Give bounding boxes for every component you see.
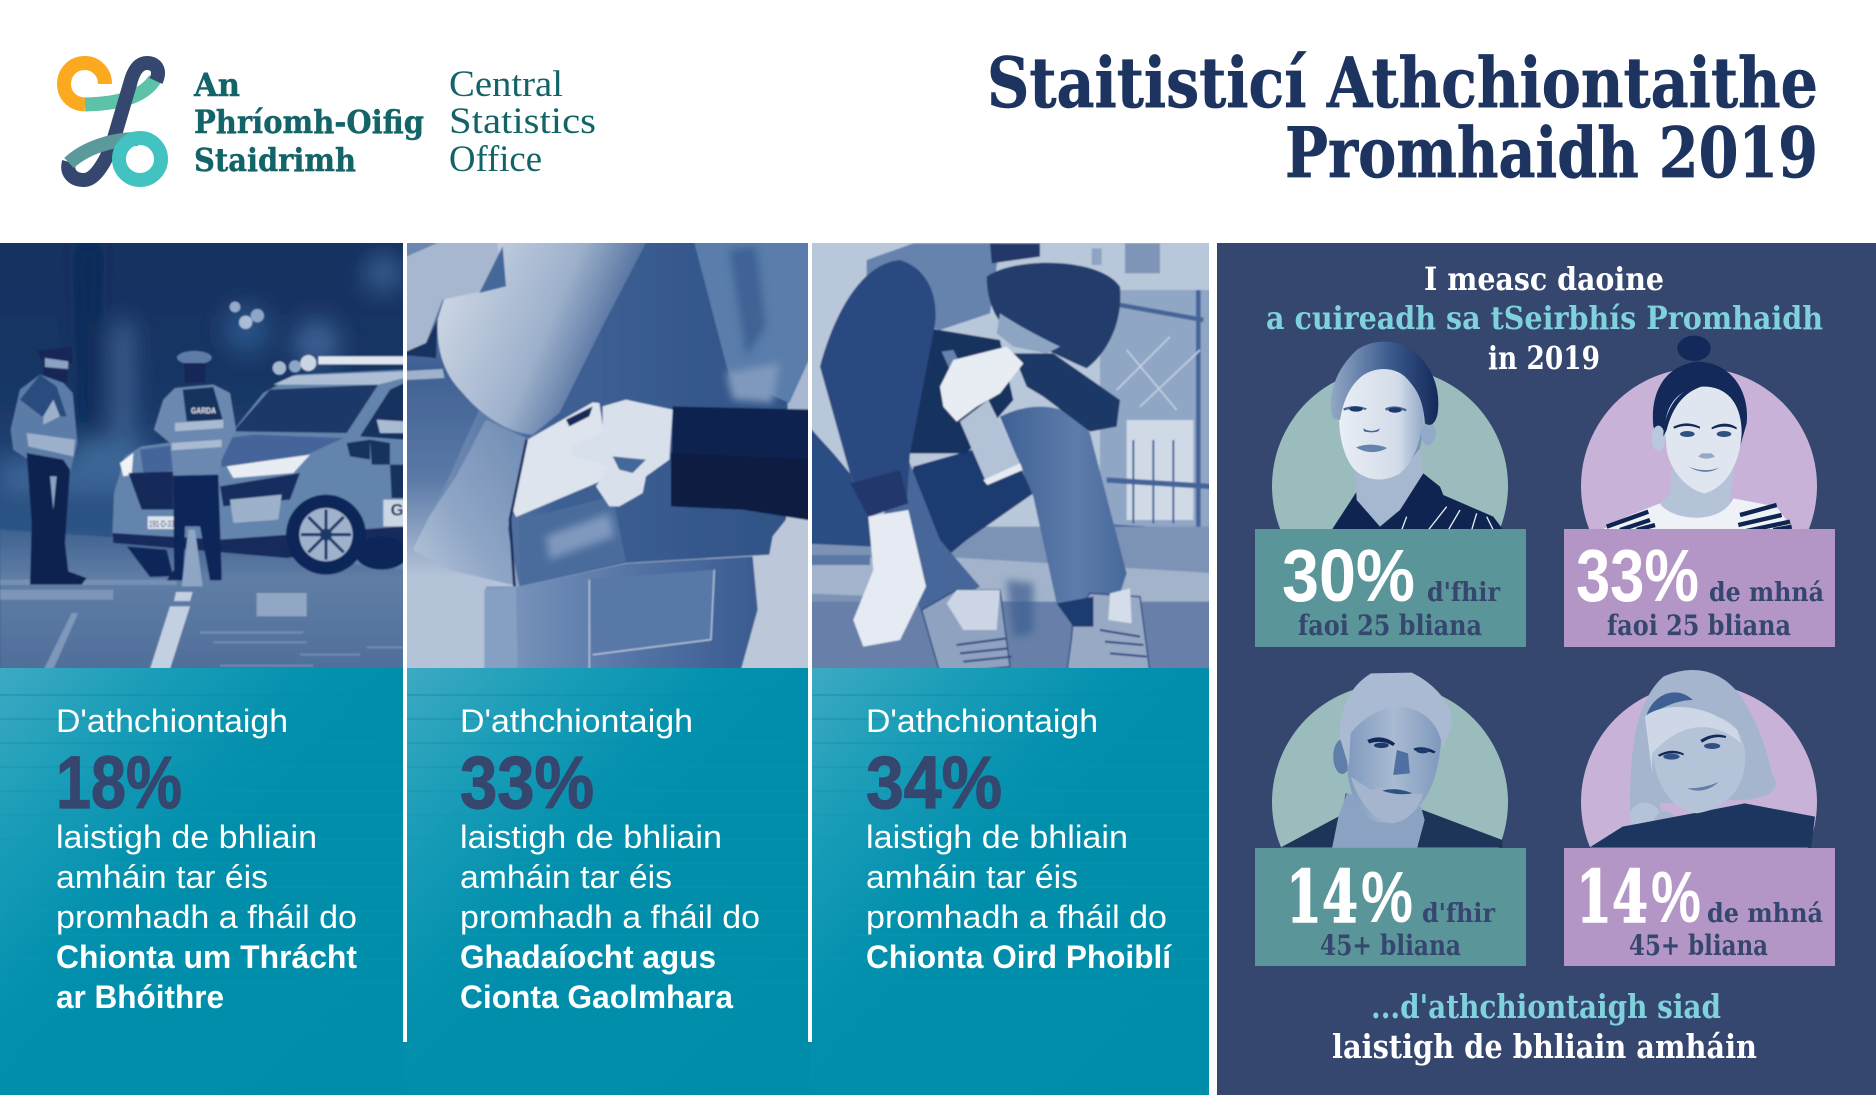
road markings: [150, 592, 193, 669]
logo text: English name: Statistics: [449, 101, 596, 142]
photo: road traffic checkpoint: 191-D-33: [149, 519, 174, 529]
text: road traffic offences: [56, 703, 357, 1015]
stat box: men under 25: faoi 25 bliana: [1298, 609, 1482, 642]
text: closing statement: laistigh de bhliain amháin: [1332, 1027, 1757, 1066]
text: road traffic offences: promhadh a fháil do: [56, 899, 357, 935]
portrait: older man: [1272, 672, 1508, 848]
text: public order offences: laistigh de bhliain: [866, 819, 1128, 855]
title: [987, 43, 1818, 194]
panel: probation service demographics: [1217, 243, 1876, 1095]
panel: public order statistic: [810, 668, 1209, 1095]
jeans: [484, 556, 758, 676]
text: road traffic offences: amháin tar éis: [56, 859, 268, 895]
text: theft offences: amháin tar éis: [460, 859, 672, 895]
number plate: [148, 516, 175, 529]
hand holding bottle: [960, 400, 1022, 483]
road surface: [0, 530, 404, 669]
photo: road traffic checkpoint: G: [391, 501, 404, 520]
heading: probation intro: I measc daoine: [1424, 260, 1664, 298]
zip: [510, 440, 527, 610]
sleeve cuff: [671, 406, 817, 521]
text: theft offences: 33%: [460, 741, 594, 824]
photo: person on kerb with bottle: [800, 233, 1220, 677]
stat box: men over 45: 14: [1286, 854, 1358, 939]
stat box: women under 25: faoi 25 bliana: [1607, 609, 1791, 642]
text: public order offences: 34%: [866, 741, 1002, 824]
logo text: English name: Office: [449, 139, 542, 180]
car: [112, 370, 404, 570]
officer left: [38, 348, 72, 363]
text: public order offences: [866, 703, 1172, 975]
text: public order offences: Chionta Oird Phoiblí: [866, 939, 1172, 975]
text: theft offences: laistigh de bhliain: [460, 819, 722, 855]
text: public order offences: promhadh a fháil do: [866, 899, 1167, 935]
text: closing statement: ...d'athchiontaigh siad: [1371, 987, 1721, 1026]
text: theft offences: Ghadaíocht agus: [460, 939, 716, 975]
photo: road traffic checkpoint: [0, 236, 410, 676]
stat box: men over 45: d'fhir: [1422, 899, 1495, 929]
icon: interlaced ribbon mark: [64, 63, 161, 180]
text: road traffic offences: laistigh de bhliain: [56, 819, 317, 855]
fence background: [1100, 290, 1217, 530]
text: closing statement: [1332, 987, 1757, 1066]
text: public order offences: D'athchiontaigh: [866, 703, 1098, 739]
heading: probation intro: in 2019: [1488, 339, 1600, 377]
text: theft offences: [460, 703, 760, 1015]
stat box: women under 25: 33%: [1576, 534, 1699, 617]
boots: [922, 590, 1010, 673]
logo text: Irish name: [193, 66, 424, 179]
ground and kerb: [812, 526, 1209, 602]
stat box: women under 25: [1564, 529, 1835, 647]
logo text: Irish name: Staidrimh: [194, 141, 356, 179]
portrait: young man: [1272, 342, 1508, 529]
jeans: [912, 449, 1034, 554]
panel: theft statistic: [405, 668, 810, 1095]
phone: [513, 402, 609, 517]
text: theft offences: promhadh a fháil do: [460, 899, 760, 935]
text: road traffic offences: Chionta um Thrácht: [56, 939, 357, 975]
leather sleeve: [437, 236, 649, 435]
traffic cone: [182, 530, 203, 586]
portrait: older woman: [1581, 670, 1817, 848]
heading: probation intro: [1266, 260, 1823, 377]
stat box: men over 45: 45+ bliana: [1320, 929, 1461, 962]
stat box: women over 45: de mhná: [1707, 899, 1823, 929]
text: theft offences: Cionta Gaolmhara: [460, 979, 733, 1015]
text: public order offences: amháin tar éis: [866, 859, 1078, 895]
hand: [595, 398, 674, 508]
stat box: men under 25: d'fhir: [1427, 578, 1500, 608]
lower hand: [853, 510, 926, 647]
heading: probation intro: a cuireadh sa tSeirbhís Promhaidh: [1266, 299, 1823, 337]
text: theft offences: D'athchiontaigh: [460, 703, 693, 739]
stat box: women under 25: de mhná: [1709, 578, 1824, 608]
logo text: Irish name: Phríomh-Oifig: [194, 103, 424, 141]
logo text: English name: Central: [449, 64, 563, 105]
text: road traffic offences: 18%: [56, 741, 182, 824]
stat box: men under 25: [1255, 529, 1526, 647]
panel: header background: [0, 0, 1876, 243]
logo text: English name: [449, 64, 596, 180]
stat box: women over 45: 45+ bliana: [1629, 929, 1768, 962]
text: road traffic offences: D'athchiontaigh: [56, 703, 288, 739]
photo: pickpocket taking phone: [399, 236, 819, 676]
photo: road traffic checkpoint: GARDA: [191, 407, 216, 416]
stat box: women over 45: [1564, 848, 1835, 966]
jacket and hood: [867, 243, 1000, 330]
stat box: women over 45: 14: [1576, 854, 1648, 939]
logo text: Irish name: An: [193, 66, 240, 104]
stat box: men over 45: [1255, 848, 1526, 966]
stat box: men over 45: %: [1361, 858, 1413, 938]
portrait: young woman: [1581, 336, 1817, 529]
stat box: men under 25: 30%: [1282, 534, 1415, 617]
text: road traffic offences: ar Bhóithre: [56, 979, 224, 1015]
logo: Central Statistics Office: [64, 63, 596, 180]
jacket body: [442, 243, 788, 587]
officer right: [177, 351, 212, 364]
stat box: women over 45: %: [1651, 858, 1701, 938]
panel: road traffic statistic: [0, 668, 405, 1095]
